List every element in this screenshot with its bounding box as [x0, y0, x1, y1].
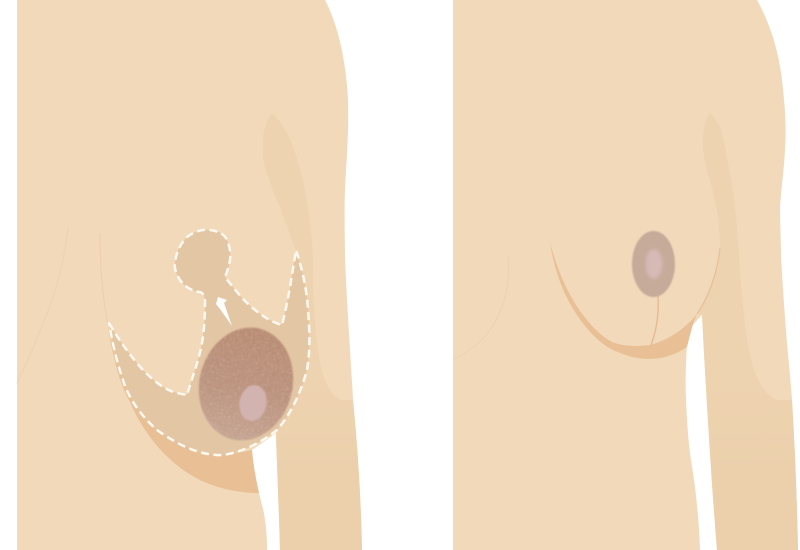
arm shading [263, 113, 362, 550]
nipple before [237, 383, 269, 423]
torso body [453, 0, 798, 550]
under-breast shadow [550, 242, 697, 359]
vertical scar [651, 296, 658, 345]
under-breast shadow [108, 325, 259, 493]
dashed incision outline [109, 230, 309, 455]
panel: after torso [453, 0, 798, 550]
faint fold line [454, 255, 509, 359]
areola after [632, 231, 675, 297]
excised skin area [109, 230, 309, 455]
panel: before torso [17, 0, 362, 550]
faint fold line [17, 227, 68, 383]
crease line right side [697, 248, 720, 314]
arm shading [697, 113, 798, 550]
torso body [17, 0, 362, 550]
arrow: nipple moves upward [216, 297, 232, 326]
breast crease line [100, 233, 108, 325]
nipple after [646, 249, 662, 279]
areola before [187, 317, 305, 451]
